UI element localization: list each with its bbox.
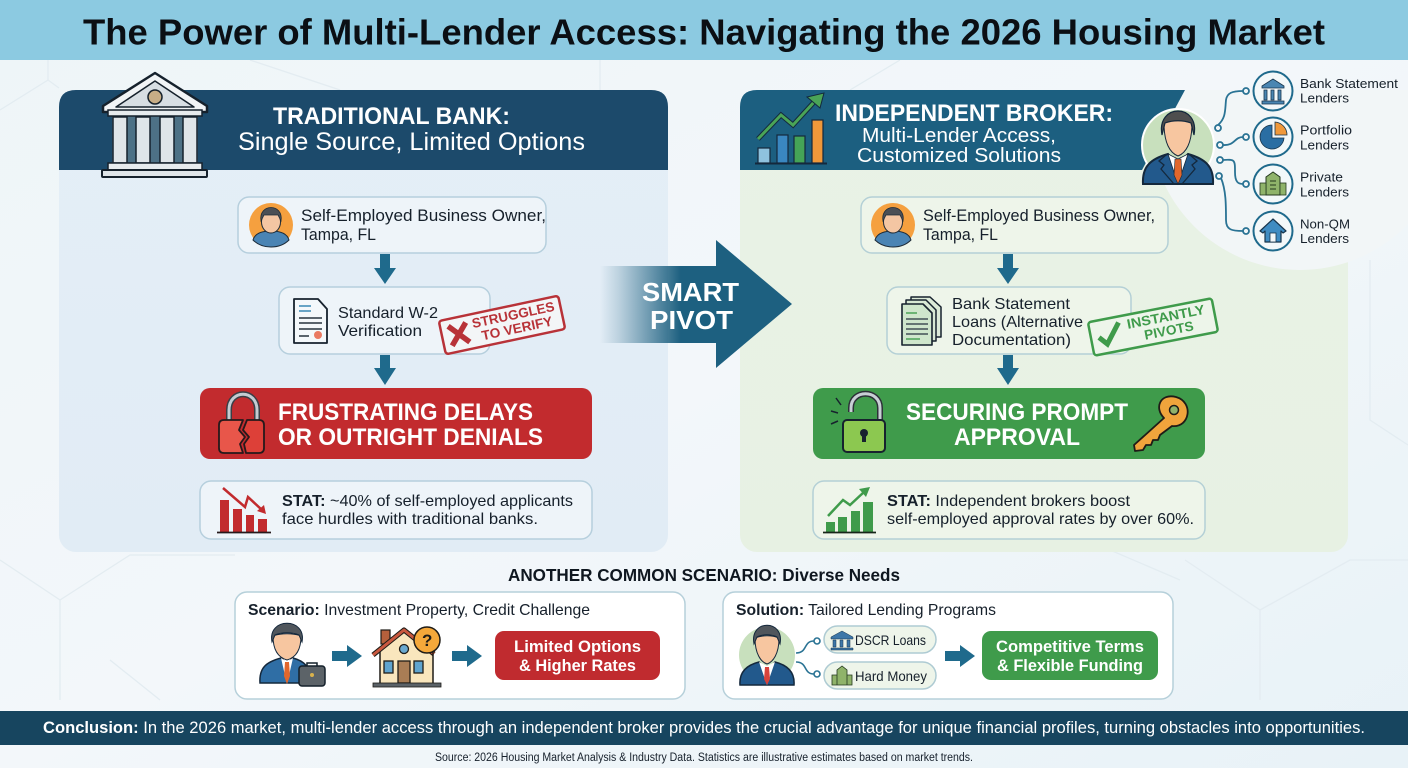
result: limited options: Limited Options — [514, 637, 641, 656]
traditional bank header: TRADITIONAL BANK: — [273, 103, 510, 130]
icon: investor with briefcase — [260, 623, 325, 686]
panel: scenario: Scenario: Investment Property, Credit Challenge — [248, 602, 590, 619]
pill: DSCR loans — [824, 626, 936, 653]
conclusion banner — [0, 711, 1408, 745]
icon: bank building — [102, 73, 207, 177]
arrow: smart pivot: SMART — [642, 277, 739, 307]
traditional bank header — [59, 90, 668, 170]
stamp: struggles to verify: STRUGGLES — [471, 299, 556, 331]
stamp: struggles to verify: TO VERIFY — [480, 314, 554, 343]
card: self-employed owner: Self-Employed Business Owner, — [301, 207, 546, 225]
card: bank statement loans: Loans (Alternative — [952, 314, 1083, 331]
card: left statistic — [200, 481, 592, 539]
card: bank statement loans — [887, 287, 1131, 354]
panel: scenario — [235, 592, 685, 699]
stamp: struggles to verify — [439, 296, 565, 354]
title banner: The Power of Multi-Lender Access: Navigating the 2026 Housing Market — [83, 12, 1325, 52]
independent broker header: Customized Solutions — [857, 145, 1061, 167]
source note: Source: 2026 Housing Market Analysis & Industry Data. Statistics are illustrative estimates based on market trends. — [435, 752, 973, 764]
connectors to loan types — [796, 638, 820, 677]
conclusion banner: Conclusion: In the 2026 market, multi-lender access through an independent broker provides the crucial advantage for unique financial profiles, turning obstacles into opportunities. — [43, 718, 1365, 737]
card: left statistic: face hurdles with traditional banks. — [282, 511, 538, 528]
card: W-2 verification: Standard W-2 — [338, 305, 438, 322]
icon: house with question mark: ? — [422, 631, 432, 650]
icon: declining chart — [217, 488, 271, 532]
stamp: instantly pivots — [1088, 298, 1218, 356]
stamp: instantly pivots: INSTANTLY — [1126, 302, 1206, 332]
card: left statistic: STAT: ~40% of self-employed applicants — [282, 493, 573, 510]
independent broker header: INDEPENDENT BROKER: — [835, 100, 1113, 127]
banner: securing prompt approval: APPROVAL — [954, 424, 1080, 451]
result: limited options: & Higher Rates — [519, 656, 636, 675]
card: bank statement loans: Bank Statement — [952, 296, 1071, 313]
icon: rising chart — [823, 487, 876, 532]
result: competitive terms — [982, 631, 1158, 680]
banner: securing prompt approval — [813, 388, 1205, 459]
lender: portfolio: Lenders — [1300, 138, 1350, 152]
lender network backdrop — [1165, 90, 1408, 270]
panel: solution: Solution: Tailored Lending Programs — [736, 602, 996, 619]
lender: bank statement: Lenders — [1300, 90, 1350, 106]
lender: non-QM: Lenders — [1300, 231, 1350, 246]
arrow: solution to result — [945, 645, 975, 667]
independent broker header: Multi-Lender Access, — [862, 125, 1056, 147]
panel: independent broker — [740, 70, 1408, 552]
icon: growth chart — [755, 93, 827, 164]
arrow: owner to bank statement loans — [997, 254, 1019, 284]
lender: non-QM — [1254, 212, 1350, 250]
traditional bank header: Single Source, Limited Options — [238, 128, 585, 156]
card: self-employed owner — [861, 197, 1168, 253]
card: right statistic: STAT: Independent brokers boost — [887, 493, 1131, 510]
icon: document — [294, 299, 327, 343]
banner: frustrating delays: OR OUTRIGHT DENIALS — [278, 424, 543, 451]
icon: open lock — [831, 394, 885, 452]
lender: bank statement — [1254, 72, 1398, 110]
arrow: smart pivot: PIVOT — [650, 305, 733, 335]
arrow: house to result — [452, 645, 482, 667]
lender: non-QM: Non-QM — [1300, 216, 1350, 232]
card: W-2 verification — [279, 287, 490, 354]
arrow: owner to verification — [374, 254, 396, 284]
arrow: loans to approval — [997, 355, 1019, 385]
card: self-employed owner — [238, 197, 546, 253]
banner: frustrating delays: FRUSTRATING DELAYS — [278, 399, 533, 426]
card: self-employed owner: Tampa, FL — [301, 226, 376, 244]
card: self-employed owner: Self-Employed Business Owner, — [923, 207, 1155, 225]
icon: business owner avatar — [249, 203, 293, 247]
banner: frustrating delays — [200, 388, 592, 459]
icon: broken lock — [219, 394, 264, 453]
lender: private: Private — [1300, 170, 1343, 184]
card: W-2 verification: Verification — [338, 323, 422, 340]
card: self-employed owner: Tampa, FL — [923, 226, 998, 244]
title banner — [0, 0, 1408, 60]
lender: portfolio — [1254, 118, 1352, 156]
arrow: investor to house — [332, 645, 362, 667]
result: limited options — [495, 631, 660, 680]
panel: solution — [723, 592, 1173, 699]
result: competitive terms: & Flexible Funding — [997, 656, 1143, 675]
banner: securing prompt approval: SECURING PROMPT — [906, 399, 1128, 426]
lender connectors — [1215, 88, 1249, 234]
lender: private — [1254, 164, 1350, 204]
card: right statistic: self-employed approval rates by over 60%. — [887, 511, 1194, 528]
pill: DSCR loans: DSCR Loans — [855, 632, 926, 648]
lender: portfolio: Portfolio — [1300, 122, 1352, 138]
stamp: instantly pivots: PIVOTS — [1143, 318, 1195, 343]
pill: hard money: Hard Money — [855, 668, 927, 684]
card: bank statement loans: Documentation) — [952, 332, 1071, 349]
icon: key — [1134, 396, 1188, 451]
panel: traditional bank — [59, 73, 668, 552]
lender: bank statement: Bank Statement — [1300, 76, 1398, 91]
card: right statistic — [813, 481, 1205, 539]
icon: advisor avatar — [739, 625, 795, 685]
pill: hard money — [824, 662, 936, 689]
icon: broker avatar — [1142, 109, 1214, 184]
arrow: smart pivot — [600, 240, 792, 368]
icon: house with question mark — [373, 627, 441, 687]
independent broker header — [740, 90, 1185, 170]
icon: document stack — [902, 297, 941, 345]
arrow: verification to denial — [374, 355, 396, 385]
icon: business owner avatar — [871, 203, 915, 247]
result: competitive terms: Competitive Terms — [996, 637, 1144, 656]
lender: private: Lenders — [1300, 184, 1350, 200]
heading: another common scenario: ANOTHER COMMON SCENARIO: Diverse Needs — [508, 565, 900, 585]
